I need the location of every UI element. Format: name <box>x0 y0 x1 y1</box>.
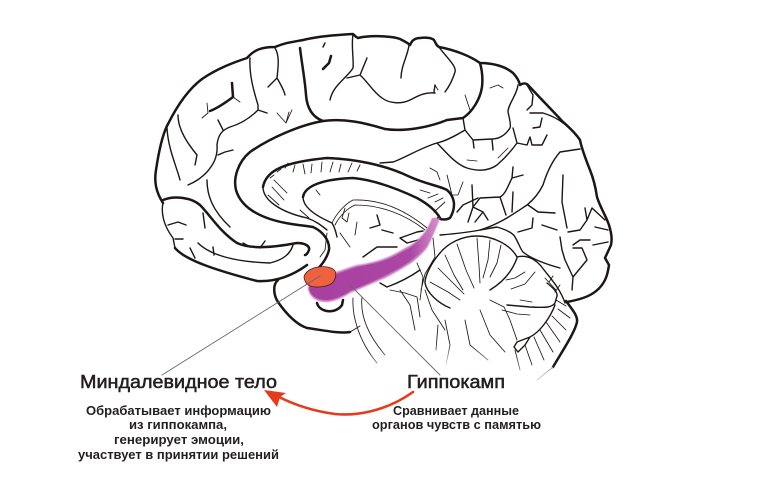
hippocampus heading: Гиппокамп <box>407 372 505 392</box>
amygdala leader line <box>162 276 320 375</box>
amygdala highlight <box>304 267 336 287</box>
amygdala label <box>78 372 279 462</box>
hippocampus leader line <box>350 285 440 375</box>
thalamus and brainstem <box>274 190 435 363</box>
amygdala description: участвует в принятии решений <box>78 448 279 462</box>
cerebellum <box>425 236 577 380</box>
amygdala description: из гиппокампа, <box>129 418 227 432</box>
hippocampus description: Сравнивает данные <box>393 404 519 418</box>
amygdala description: Обрабатывает информацию <box>86 404 271 418</box>
amygdala heading: Миндалевидное тело <box>80 372 277 392</box>
red arrow from hippocampus to amygdala <box>264 390 413 414</box>
frontal and parietal sulci <box>167 35 608 290</box>
amygdala description: генерирует эмоции, <box>114 433 244 447</box>
corpus callosum <box>263 158 454 237</box>
brain illustration <box>155 34 612 474</box>
temporal lobe <box>162 180 309 281</box>
hippocampus description <box>372 404 541 432</box>
outer cortex outline <box>155 34 612 302</box>
fade at the bottom of the brainstem <box>305 342 575 474</box>
amygdala description <box>78 404 279 462</box>
hippocampus description: органов чувств с памятью <box>372 418 541 432</box>
hippocampus highlight <box>308 218 440 302</box>
hippocampus label <box>372 372 541 432</box>
